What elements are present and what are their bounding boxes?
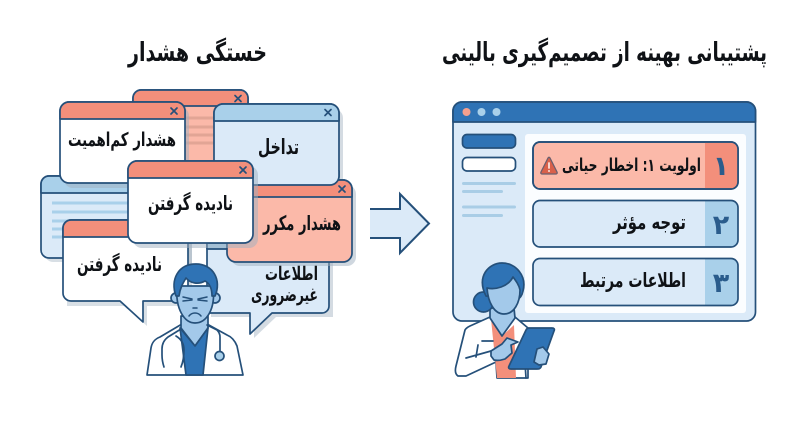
clinician face — [487, 277, 520, 314]
blue window lower edge over repeated alert — [214, 171, 339, 185]
label: interference: تداخل — [258, 135, 299, 159]
label: relevant information: اطلاعات مرتبط — [580, 268, 686, 292]
priority 1 row — [533, 142, 738, 189]
label: priority 1 life-threatening: اولویت ۱: اخطار حیاتی — [562, 156, 701, 176]
window: back red — [133, 90, 248, 200]
window: white column behind — [188, 240, 207, 280]
doctor expression — [183, 297, 207, 316]
clinician coat lines — [466, 341, 526, 378]
priority 3 row — [533, 258, 738, 306]
clinician scrub — [491, 319, 516, 378]
priority 2 row — [533, 200, 738, 247]
label: ignoring center: نادیده گرفتن — [148, 191, 233, 215]
digit 2: ۲ — [713, 210, 730, 241]
panel: pile of alert windows — [41, 90, 356, 338]
speech bubble: ignoring — [63, 220, 192, 326]
label: unnecessary: اطلاعات — [265, 263, 318, 285]
label: repeated alert: هشدار مکرر — [262, 211, 341, 235]
dashboard title bar — [453, 102, 756, 122]
sidebar — [462, 134, 516, 217]
doctor stethoscope — [162, 325, 220, 367]
label: unnecessary line 2: غیرضروری — [251, 284, 318, 306]
panel: clinical dashboard — [453, 102, 756, 321]
dashboard frame — [453, 102, 756, 321]
window: back blue — [41, 176, 195, 262]
digit 3: ۳ — [713, 268, 730, 299]
doctor hair — [174, 264, 217, 296]
dashboard window dots — [462, 108, 500, 116]
label: low importance alert: هشدار کم‌اهمیت — [68, 129, 176, 151]
clinician hair — [482, 263, 524, 300]
clinician hair bun — [474, 292, 494, 312]
clinician coat — [455, 317, 528, 378]
icon: frustrated doctor — [147, 264, 243, 375]
doctor coat — [147, 324, 243, 375]
icon: warning triangle — [541, 157, 557, 174]
clinician pointing hand — [491, 338, 518, 360]
label: effective attention: توجه مؤثر — [612, 210, 686, 234]
clinician holding hand — [534, 347, 549, 365]
arrow — [370, 194, 429, 253]
window: ignoring center — [128, 161, 258, 248]
doctor ears — [171, 293, 220, 303]
icon: clinician with tablet — [455, 263, 554, 378]
window: repeated alert — [227, 180, 356, 266]
main content panel — [525, 134, 746, 313]
digit 1: ۱ — [713, 151, 729, 182]
clinician neck — [490, 308, 515, 336]
window: interference — [214, 104, 343, 190]
stethoscope chest piece — [215, 352, 224, 360]
doctor face — [177, 286, 214, 323]
label: ignoring bubble: نادیده گرفتن — [77, 252, 162, 276]
title: alert fatigue: خستگی هشدار — [127, 37, 267, 68]
doctor neck — [181, 316, 208, 346]
doctor scrubs — [180, 328, 208, 375]
speech bubble: unnecessary information — [207, 243, 333, 338]
window: low importance alert — [60, 102, 189, 188]
tablet — [509, 328, 554, 369]
